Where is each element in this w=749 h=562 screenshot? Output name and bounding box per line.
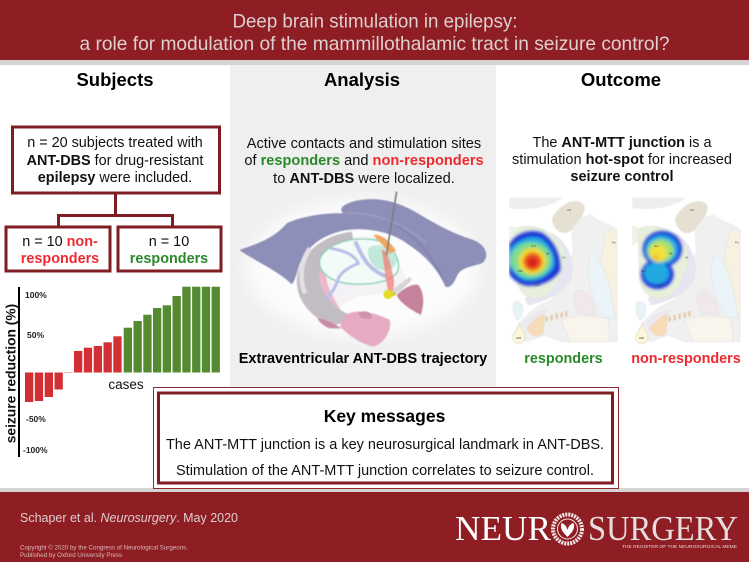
y axis tick labels: 50% (27, 330, 44, 340)
y axis tick labels: -50% (26, 414, 46, 424)
atlas labels: Pu (612, 240, 616, 244)
logo: Neurosurgery wordmark: SURGERY (588, 510, 738, 548)
panel: key messages (154, 388, 618, 488)
soft white halo (247, 200, 480, 337)
y axis tick labels: -100% (23, 445, 48, 455)
text: analysis description: to ANT-DBS were localized. (273, 171, 455, 187)
atlas labels: MTT (658, 284, 664, 288)
text: outcome description: seizure control (570, 169, 674, 185)
atlas labels: Cd (690, 208, 694, 212)
citation: Schaper et al. Neurosurgery. May 2020 (20, 510, 238, 525)
stimulation sites (382, 250, 394, 293)
emblem (553, 514, 582, 544)
atlas labels: MTT (535, 284, 541, 288)
x axis label: cases (108, 377, 144, 392)
message 2: Stimulation of the ANT-MTT junction correlates to seizure control. (176, 463, 594, 479)
box: non-responders (6, 227, 110, 271)
heading: outcome: Outcome (581, 69, 661, 90)
box: all subjects: epilepsy were included. (38, 170, 192, 186)
anterior nucleus orange (373, 235, 396, 254)
box: non-responders: responders (21, 251, 99, 267)
heatmap: non-responders (625, 198, 741, 344)
box: responders: n = 10 (149, 234, 189, 250)
atlas labels: Mt (546, 252, 549, 256)
thalamus (320, 239, 399, 284)
DBS electrode (387, 192, 397, 255)
title: a role for modulation of the mammillothalamic tract in seizure control? (80, 34, 670, 55)
hippocampus lower pink (305, 261, 347, 327)
atlas labels: Cd (567, 208, 571, 212)
inner white background of the arc (310, 236, 407, 313)
y axis title: seizure reduction (%) (4, 304, 18, 443)
message 1: The ANT-MTT junction is a key neurosurgical landmark in ANT-DBS. (166, 437, 604, 453)
logo: Neurosurgery wordmark: NEUR (455, 510, 551, 548)
atlas labels: Ant (531, 244, 536, 248)
analysis panel background (230, 64, 496, 391)
logo: Neurosurgery wordmark (455, 510, 738, 550)
heading: analysis: Analysis (324, 69, 400, 90)
text: analysis description: of responders and non-responders (244, 153, 484, 169)
mammillothalamic tract and fornix (325, 248, 358, 300)
header band (0, 0, 749, 65)
atlas outlines (502, 198, 618, 344)
label: non-responders: non-responders (631, 351, 741, 367)
text: outcome description: stimulation hot-spot for increased (512, 152, 732, 168)
atlas labels: MD (641, 269, 646, 273)
atlas labels: Mt (669, 252, 672, 256)
hot-spot (641, 231, 682, 289)
logo: Neurosurgery wordmark: THE REGISTER OF THE NEUROSURGICAL MEME (622, 544, 738, 550)
box: all subjects (12, 127, 220, 193)
atlas labels: MM (516, 336, 522, 340)
label: responders: responders (524, 351, 603, 367)
text: outcome description: The ANT-MTT junction is a (532, 135, 712, 151)
ventricle (239, 199, 486, 287)
atlas labels: MM (639, 336, 645, 340)
box: responders (118, 227, 221, 271)
y axis tick labels (23, 290, 48, 455)
atlas labels: Pu (735, 240, 739, 244)
yellow contact (383, 290, 393, 299)
negative bars (25, 372, 73, 402)
atlas labels (516, 208, 616, 340)
atlas labels: VL (562, 255, 566, 259)
y axis (18, 287, 20, 457)
copyright: Copyright © 2020 by the Congress of Neurological Surgeons. (20, 544, 188, 552)
hot-spot (509, 231, 560, 286)
figure: 3D brain model with DBS trajectory (239, 192, 486, 347)
y axis tick labels: 100% (25, 290, 47, 300)
box: responders: responders (130, 251, 208, 267)
fornix arc (297, 232, 353, 325)
bar chart: seizure reduction per case (4, 287, 220, 457)
copyright: Published by Oxford University Press (20, 552, 122, 559)
fornix column right (387, 277, 412, 297)
footer band (0, 488, 749, 562)
heading: subjects: Subjects (76, 69, 154, 90)
heading: Key messages (324, 406, 446, 426)
responder bars (124, 287, 220, 372)
box: all subjects: n = 20 subjects treated with (27, 135, 203, 151)
atlas labels (639, 208, 739, 340)
atlas labels: MD (518, 269, 523, 273)
panel: subjects flow diagram (6, 127, 221, 271)
atlas labels: VL (685, 255, 689, 259)
box: non-responders: n = 10 non- (22, 234, 98, 250)
caption: trajectory: Extraventricular ANT-DBS trajectory (239, 351, 487, 367)
title: Deep brain stimulation in epilepsy: (232, 12, 518, 32)
box: all subjects: ANT-DBS for drug-resistant (27, 153, 203, 169)
heatmap: responders (502, 198, 618, 344)
connector lines (58, 193, 172, 227)
pink lower hippocampus head (340, 311, 390, 347)
atlas labels: Ant (654, 244, 659, 248)
non-responder positive bars (74, 336, 122, 372)
atlas outlines (625, 198, 741, 344)
text: analysis description: Active contacts and stimulation sites (247, 136, 481, 152)
pink right amygdala (397, 285, 423, 315)
